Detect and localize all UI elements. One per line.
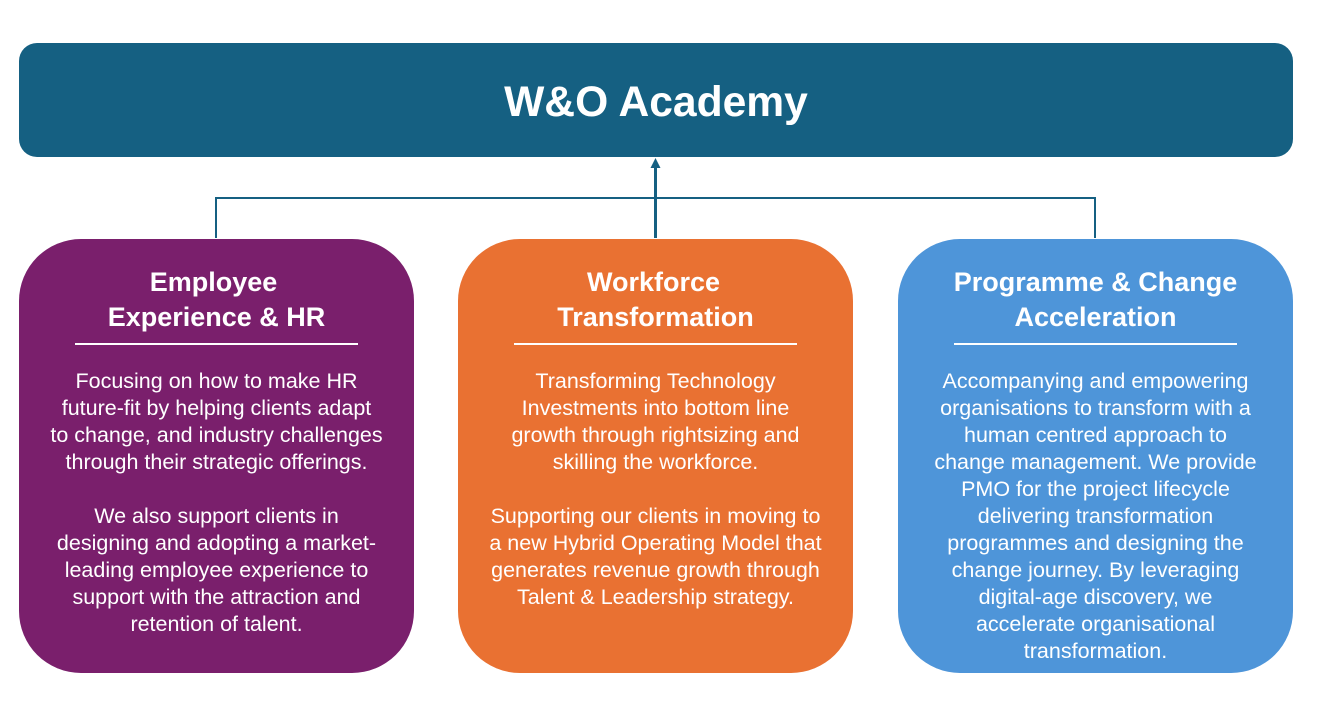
text block: HR description: designing and adopting a market- [57, 531, 376, 555]
text block: programme description [934, 369, 1257, 663]
title banner [19, 43, 1293, 157]
text block: workforce description: growth through rightsizing and [511, 423, 800, 447]
text block: workforce description: skilling the workforce. [553, 450, 758, 474]
panel: Workforce Transformation [458, 239, 853, 673]
text block: HR description: support with the attraction and [72, 585, 361, 609]
text block: HR description: We also support clients in [94, 504, 339, 528]
panel: Programme & Change Acceleration [898, 239, 1293, 673]
heading: Programme & Change Acceleration: Programme & Change [954, 267, 1237, 297]
panel: Employee Experience & HR [19, 239, 414, 673]
text block: programme description: accelerate organisational [976, 612, 1215, 636]
text block: workforce description: Talent & Leadership strategy. [517, 585, 794, 609]
text block: programme description: transformation. [1024, 639, 1167, 663]
heading: Employee Experience & HR: Employee [150, 267, 277, 297]
heading: Employee Experience & HR: Experience & HR [108, 302, 325, 332]
text block: workforce description: generates revenue growth through [491, 558, 820, 582]
text block: HR description: through their strategic offerings. [66, 450, 367, 474]
text block: programme description: PMO for the project lifecycle [961, 477, 1230, 501]
text block: programme description: change journey. By leveraging [952, 558, 1239, 582]
heading: Workforce Transformation [557, 267, 754, 332]
text block: programme description: human centred approach to [964, 423, 1227, 447]
text block: programme description: Accompanying and empowering [943, 369, 1248, 393]
heading: Workforce Transformation: Transformation [557, 302, 754, 332]
heading: Programme & Change Acceleration: Acceleration [1014, 302, 1177, 332]
text block: workforce description [489, 369, 822, 609]
divider [514, 343, 797, 345]
text block: programme description: organisations to transform with a [940, 396, 1251, 420]
text block: programme description: delivering transformation [978, 504, 1213, 528]
text block: programme description: programmes and designing the [947, 531, 1244, 555]
text block: workforce description: Investments into bottom line [522, 396, 789, 420]
title banner: W&O Academy [504, 78, 808, 126]
text block: workforce description: Transforming Technology [535, 369, 776, 393]
text block: HR description: leading employee experience to [65, 558, 368, 582]
divider [75, 343, 358, 345]
text block: HR description: future-fit by helping clients adapt [62, 396, 371, 420]
heading: Employee Experience & HR [108, 267, 325, 332]
heading: Programme & Change Acceleration [954, 267, 1237, 332]
text block: workforce description: a new Hybrid Operating Model that [489, 531, 822, 555]
divider [954, 343, 1237, 345]
text block: HR description: retention of talent. [130, 612, 303, 636]
text block: workforce description: Supporting our clients in moving to [491, 504, 820, 528]
text block: HR description: to change, and industry challenges [50, 423, 383, 447]
text block: programme description: change management. We provide [934, 450, 1257, 474]
text block: programme description: digital-age discovery, we [979, 585, 1212, 609]
text block: HR description: Focusing on how to make HR [75, 369, 358, 393]
text block: HR description [50, 369, 383, 636]
heading: Workforce Transformation: Workforce [587, 267, 720, 297]
